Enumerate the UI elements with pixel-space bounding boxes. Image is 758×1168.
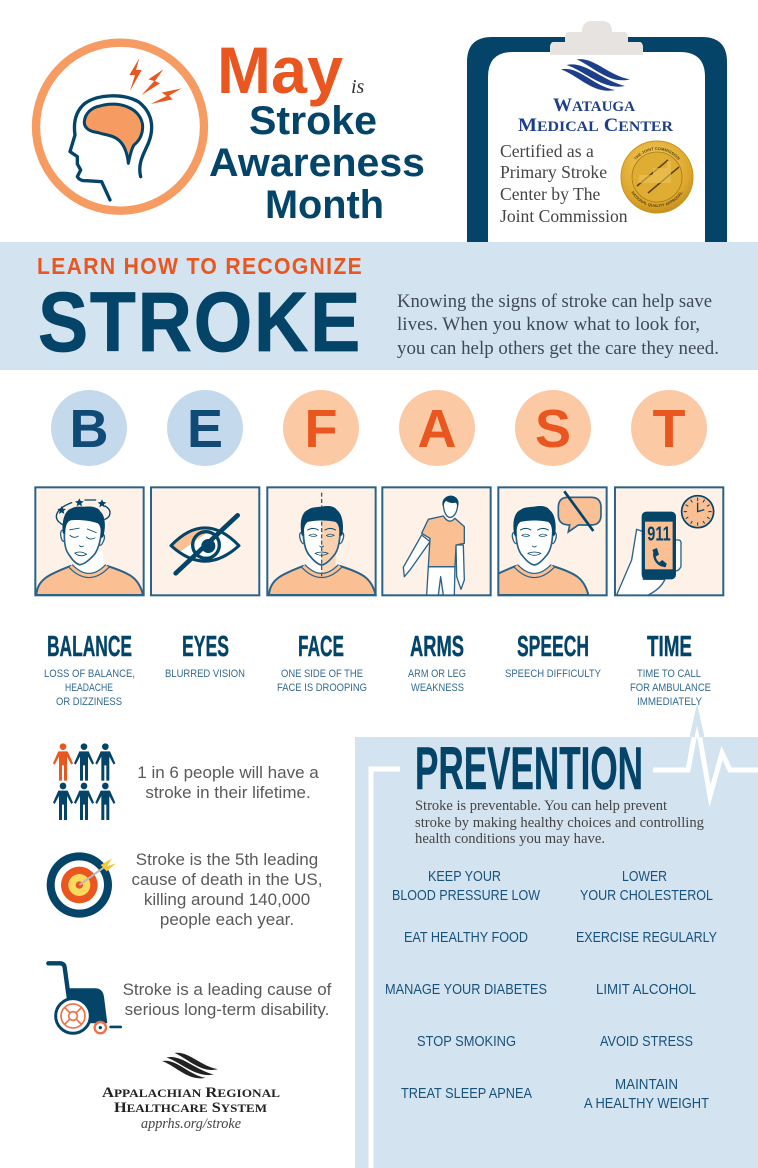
BEFAST letter circles: E [187,399,223,459]
text: prevention description: health conditions you may have. [415,831,605,847]
label: balance: HEADACHE [65,682,113,694]
text: 5th leading cause: people each year. [160,910,294,929]
label: eyes [165,631,245,680]
heading: learn how to recognize: LEARN HOW TO RECOGNIZE [37,253,363,279]
text: long-term disability [123,980,332,1019]
label: arms: ARMS [410,631,464,663]
label: arms [408,631,466,694]
text: long-term disability: serious long-term disability. [125,1000,329,1019]
icon panel: balance [35,487,144,595]
text: certification statement: Joint Commission [500,206,628,226]
text: 5th leading cause: Stroke is the 5th leading [136,850,318,869]
logo: Appalachian Regional Healthcare System [102,1053,280,1132]
logo: Appalachian Regional Healthcare System: apprhs.org/stroke [141,1116,242,1132]
label: time: TIME TO CALL [637,668,701,680]
panel: prevention [355,715,758,1168]
text: 1 in 6 [137,763,319,802]
BEFAST letter circles: S [535,399,571,459]
title: May is Stroke Awareness Month [209,33,425,227]
title: May is Stroke Awareness Month: Month [265,183,384,227]
list: prevention tips: YOUR CHOLESTEROL [580,887,713,904]
label: time: TIME [647,631,692,663]
icon: six people [53,743,115,820]
list: prevention tips: EXERCISE REGULARLY [576,929,717,946]
BEFAST letter circles: F [304,399,338,459]
label: balance: BALANCE [47,631,132,663]
text: certification statement [500,141,628,226]
text: banner description [397,292,719,359]
label: face: FACE IS DROOPING [277,682,367,694]
BEFAST letter circles [51,390,707,466]
icon: Watauga logo waves [561,59,630,91]
BEFAST letter circles: A [418,399,456,459]
logo: Appalachian Regional Healthcare System: APPALACHIAN REGIONAL [102,1085,280,1101]
icon: Joint Commission seal: THE JOINT COMMISSION [634,147,680,160]
icon panel: time [615,487,723,595]
icon panel: speech [482,487,607,595]
icon: clipboard clip [550,21,643,55]
list: prevention tips: BLOOD PRESSURE LOW [392,887,541,904]
BEFAST letter circles: B [70,399,108,459]
label: speech [505,631,602,680]
icon: Joint Commission seal [620,140,694,214]
text: 1 in 6: 1 in 6 people will have a [137,763,319,782]
icon: wheelchair [48,963,121,1033]
text: certification statement: Primary Stroke [500,162,607,182]
text: 1 in 6: stroke in their lifetime. [145,783,311,802]
label: face: ONE SIDE OF THE [281,668,363,680]
text: 5th leading cause [132,850,322,929]
heading: stroke: STROKE [38,275,362,369]
text: Watauga Medical Center: MEDICAL CENTER [518,115,673,136]
list: prevention tips: KEEP YOUR [428,868,501,885]
label: time: IMMEDIATELY [637,696,703,708]
label: speech: SPEECH [517,631,589,663]
text: banner description: you can help others get the care they need. [397,339,719,359]
label: balance: OR DIZZINESS [56,696,122,708]
icon: Joint Commission seal: NATIONAL QUALITY APPROVAL [632,191,683,207]
list: prevention tips: LIMIT ALCOHOL [596,981,696,998]
text: banner description: Knowing the signs of stroke can help save [397,292,712,312]
label: arms: ARM OR LEG [408,668,466,680]
text: banner description: lives. When you know what to look for, [397,315,700,335]
list: prevention tips: STOP SMOKING [417,1033,516,1050]
list: prevention tips: EAT HEALTHY FOOD [404,929,528,946]
BEFAST letter circles: T [652,399,686,459]
text: 5th leading cause: killing around 140,000 [144,890,310,909]
label: balance [44,631,135,708]
text: Watauga Medical Center: WATAUGA [553,95,635,116]
label: arms: WEAKNESS [411,682,464,694]
list: prevention tips: TREAT SLEEP APNEA [401,1085,532,1102]
heartbeat line [371,715,758,1168]
text: prevention description: stroke by making healthy choices and controlling [415,815,704,831]
icon panel: face [267,487,376,595]
icon: stroke head in circle [36,43,204,211]
text: long-term disability: Stroke is a leading cause of [123,980,332,999]
text: certification statement: Certified as a [500,141,594,161]
logo: Appalachian Regional Healthcare System: HEALTHCARE SYSTEM [114,1100,267,1116]
icon panel: time: 911 [647,523,671,546]
label: face [277,631,367,694]
panel: clipboard certification [467,21,727,242]
label: balance: LOSS OF BALANCE, [44,668,135,680]
label: face: FACE [298,631,344,663]
list: prevention tips: AVOID STRESS [600,1033,693,1050]
label: speech: SPEECH DIFFICULTY [505,668,602,680]
text: prevention description: Stroke is preventable. You can help prevent [415,798,668,814]
text: 5th leading cause: cause of death in the US, [132,870,322,889]
icon panel: arms [382,487,491,595]
text: certification statement: Center by The [500,184,601,204]
list: prevention tips: LOWER [622,868,667,885]
text: Watauga Medical Center [518,95,673,136]
title: May is Stroke Awareness Month: Awareness [209,141,425,185]
title: May is Stroke Awareness Month: is [351,76,365,98]
text: prevention description [415,798,704,847]
title: May is Stroke Awareness Month: Stroke [249,99,377,143]
label: time: FOR AMBULANCE [630,682,711,694]
list: prevention tips [385,868,717,1112]
title: May is Stroke Awareness Month: May [217,33,343,107]
list: prevention tips: A HEALTHY WEIGHT [584,1095,709,1112]
label: eyes: EYES [182,631,229,663]
list: prevention tips: MANAGE YOUR DIABETES [385,981,547,998]
panel: learn how to recognize stroke banner [0,242,758,370]
icon: target with arrow [47,852,116,918]
label: time [630,631,711,708]
list: prevention tips: MAINTAIN [615,1076,678,1093]
label: eyes: BLURRED VISION [165,668,245,680]
icon panel: eyes [151,487,259,595]
